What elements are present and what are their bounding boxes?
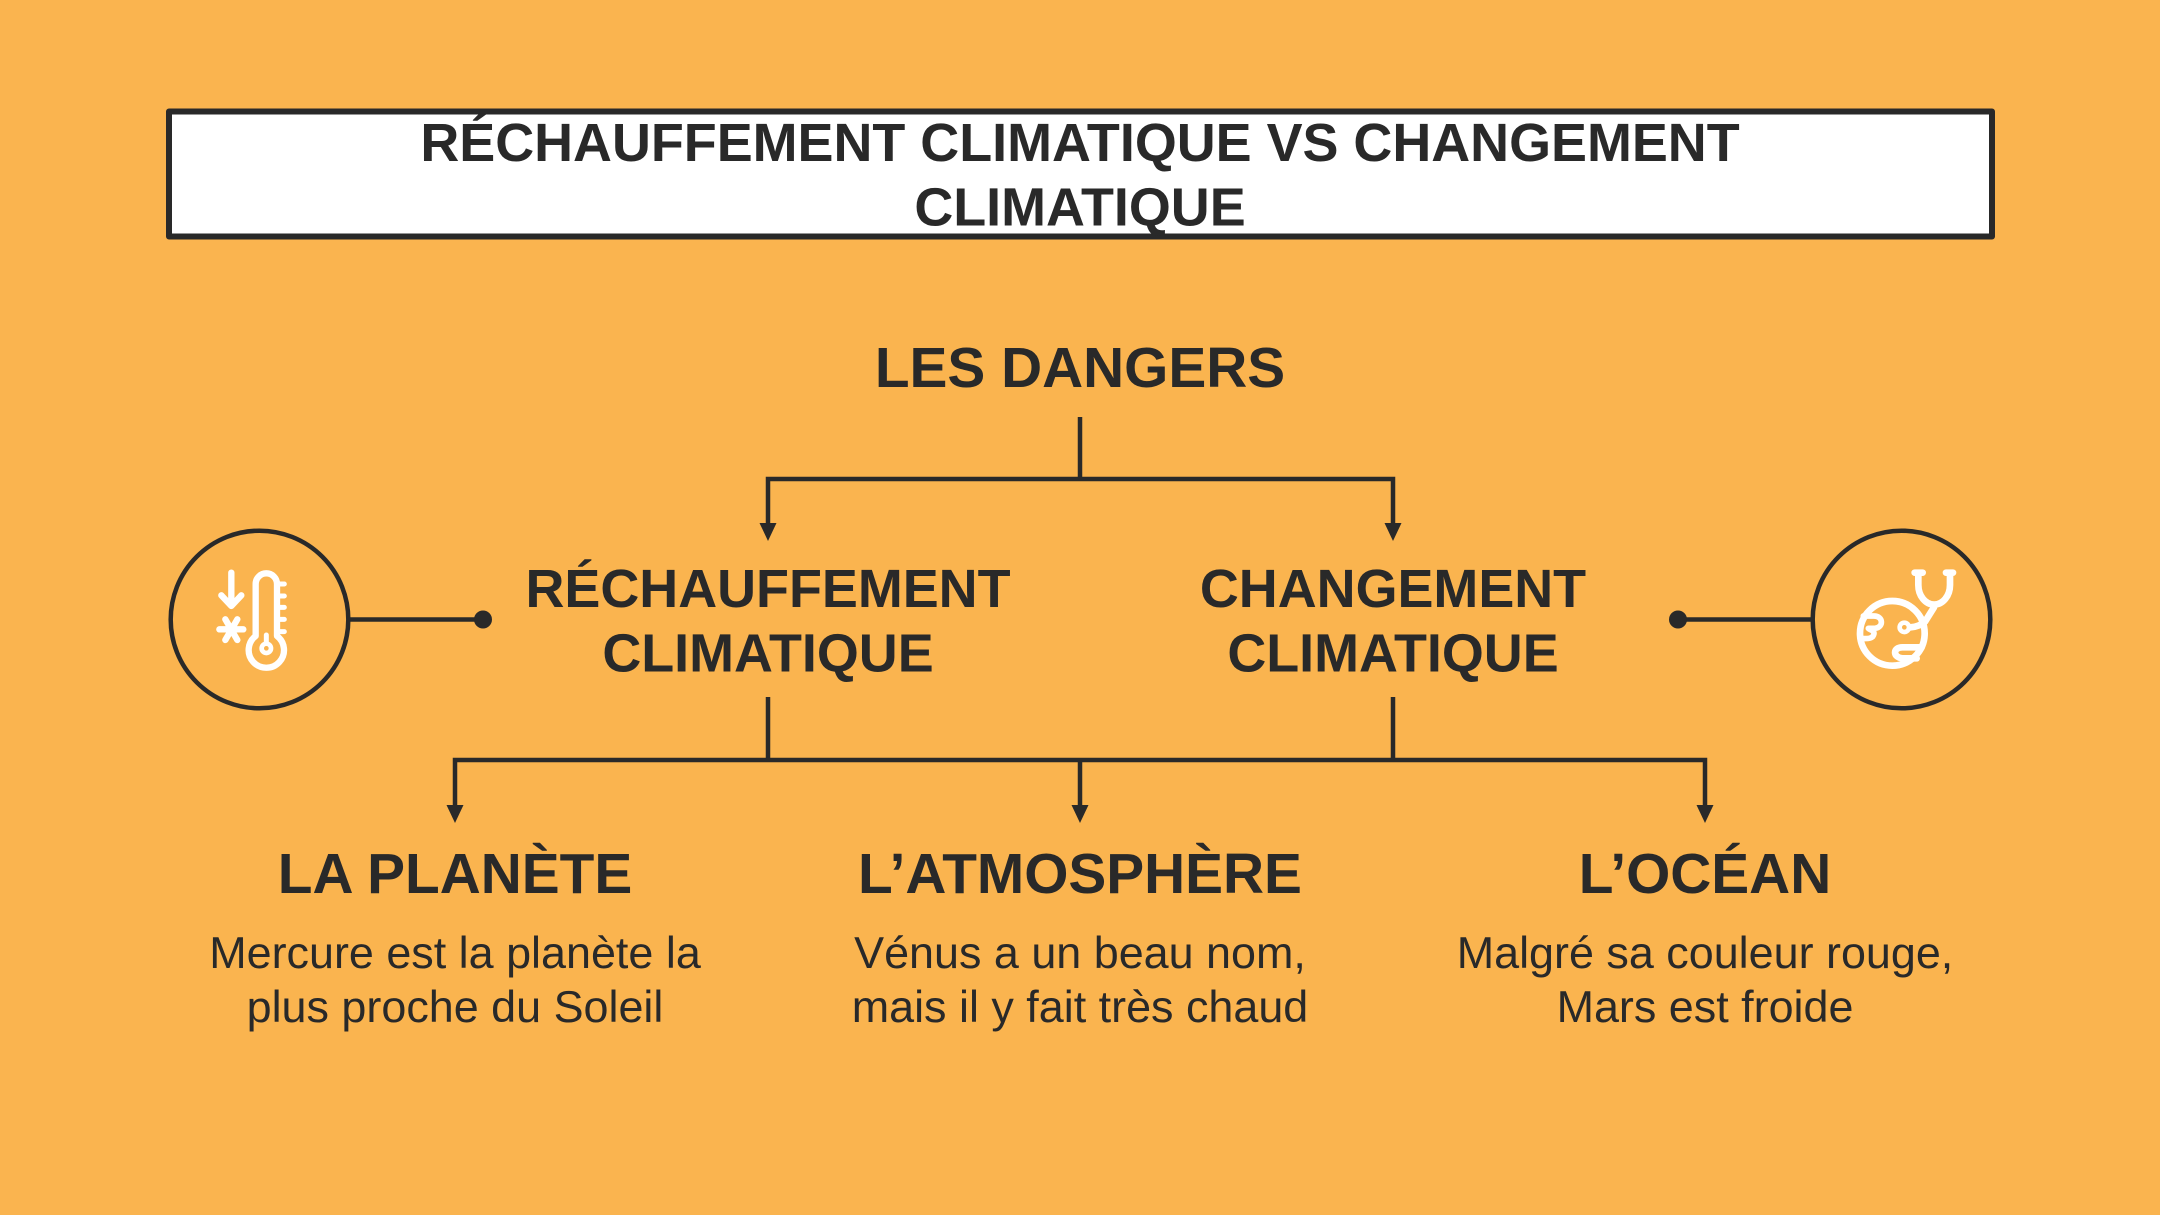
- text block: la planète: Mercure est la planète la: [209, 927, 701, 978]
- text block: la planète: LA PLANÈTE: [278, 842, 632, 906]
- text block: l'océan: Mars est froide: [1557, 981, 1853, 1032]
- text block: l'atmosphère: L’ATMOSPHÈRE: [858, 842, 1302, 906]
- icon: thermometer in circle with connector: [171, 531, 492, 708]
- top connector with arrows: [760, 417, 1402, 541]
- title box: RÉCHAUFFEMENT CLIMATIQUE VS CHANGEMENT: [420, 113, 1740, 173]
- title box: CLIMATIQUE: [914, 178, 1246, 238]
- heading: réchauffement climatique: RÉCHAUFFEMENT: [526, 559, 1011, 619]
- heading: changement climatique: CHANGEMENT: [1200, 559, 1586, 619]
- heading: changement climatique: CLIMATIQUE: [1227, 624, 1559, 684]
- text block: l'océan: Malgré sa couleur rouge,: [1457, 927, 1953, 978]
- heading: changement climatique: [1200, 559, 1586, 684]
- heading: réchauffement climatique: [526, 559, 1011, 684]
- heading: réchauffement climatique: CLIMATIQUE: [602, 624, 934, 684]
- text block: l'atmosphère: Vénus a un beau nom,: [854, 927, 1306, 978]
- text block: la planète: [209, 842, 701, 1032]
- text block: l'atmosphère: mais il y fait très chaud: [852, 981, 1308, 1032]
- text block: la planète: plus proche du Soleil: [247, 981, 663, 1032]
- bottom connector with arrows: [446, 697, 1714, 823]
- text block: l'atmosphère: [852, 842, 1308, 1032]
- text block: l'océan: L’OCÉAN: [1579, 842, 1831, 906]
- icon: earth with stethoscope in circle with connector: [1669, 531, 1990, 708]
- title box: [169, 112, 1992, 238]
- heading: les dangers: LES DANGERS: [875, 337, 1285, 400]
- text block: l'océan: [1457, 842, 1953, 1032]
